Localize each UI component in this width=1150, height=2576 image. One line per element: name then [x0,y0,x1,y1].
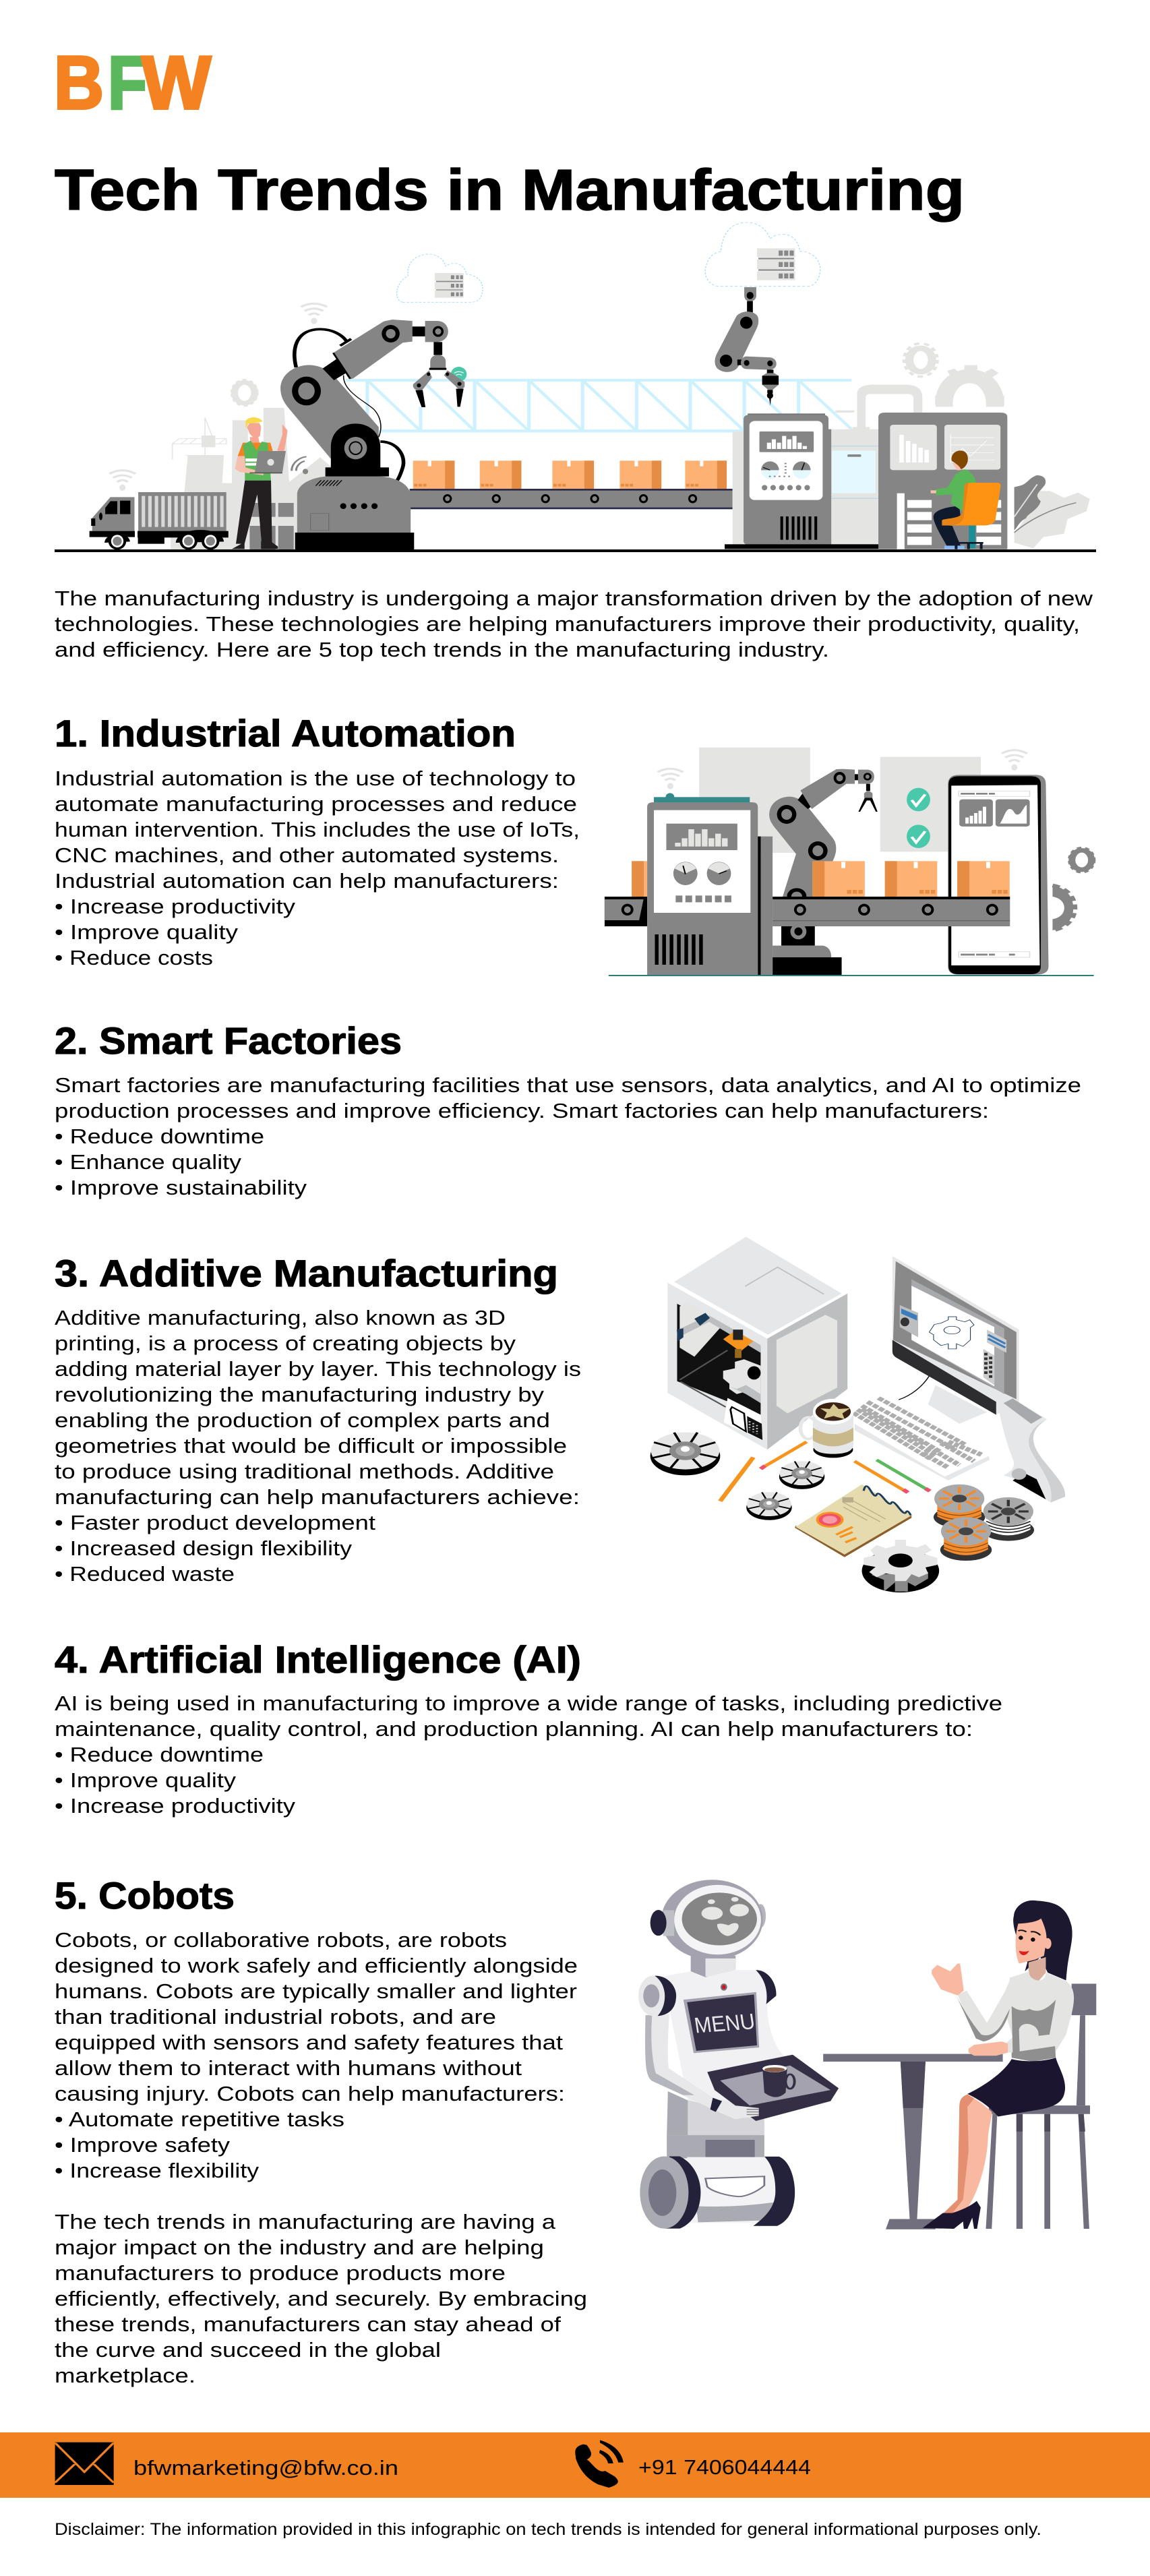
BFW logo: B [54,41,104,125]
intro paragraph: technologies. These technologies are helping manufacturers improve their productivity, quality, [55,612,1080,636]
heading: 4. Artificial Intelligence (AI): 4. Artificial Intelligence (AI) [55,1638,581,1681]
cardboard boxes [812,861,1010,897]
icon: envelope [55,2443,114,2485]
text block: cobots: humans. Cobots are typically smaller and lighter [55,1979,577,2003]
heading: 3. Additive Manufacturing: 3. Additive Manufacturing [55,1252,558,1294]
big robot arm [280,320,466,549]
tray with mug [707,2055,839,2121]
stand base [998,1398,1065,1503]
side signal icon [292,456,308,474]
text block: artificial intelligence: AI is being used in manufacturing to improve a wide range of tasks, including predictive [55,1691,1002,1715]
closing paragraph: The tech trends in manufacturing are having a [55,2210,556,2234]
phone number: +91 7406044444 [638,2455,811,2479]
intro paragraph: The manufacturing industry is undergoing a major transformation driven by the adoption of new [55,587,1093,610]
phone [948,775,1048,975]
text block: additive manufacturing: enabling the production of complex parts and [55,1408,550,1432]
text block: smart factories: • Enhance quality [55,1150,242,1174]
text block: artificial intelligence: • Increase productivity [55,1794,296,1818]
background gears and pipe [835,343,1004,427]
plant [1015,475,1090,548]
hanging robot arm with drill [715,287,779,406]
text block: industrial automation: Industrial automation can help manufacturers: [55,869,559,893]
wireframe gear [929,1317,974,1349]
text block: additive manufacturing: geometries that would be difficult or impossible [55,1434,567,1458]
text block: cobots: • Increase flexibility [55,2159,260,2182]
text block: additive manufacturing: • Increased design flexibility [55,1536,353,1560]
text block: additive manufacturing: printing, is a process of creating objects by [55,1331,516,1355]
shoulder and arm [645,2014,759,2118]
ground line [55,549,1096,552]
robot [638,1880,839,2229]
text block: industrial automation: • Increase productivity [55,895,296,918]
title: Tech Trends in Manufacturing [55,158,965,222]
cardboard boxes [619,460,727,489]
text block: industrial automation [55,767,580,969]
text block: additive manufacturing: • Faster product development [55,1511,375,1534]
chair [986,1983,1096,2229]
conveyor [605,861,1010,926]
hero right half: machines and operator [607,222,1090,549]
closing paragraph [55,2210,587,2387]
disclaimer: Disclaimer: The information provided in this infographic on tech trends is intended for general informational purposes only. [55,2520,1041,2539]
footer contact band [0,2432,1150,2498]
cardboard boxes [413,460,594,489]
wifi icons [658,750,1027,789]
operator console [878,413,1007,549]
text block: artificial intelligence: • Reduce downtime [55,1743,264,1766]
illustration: 3D printing desk [650,1236,1065,1592]
closing paragraph: marketplace. [55,2364,195,2387]
BFW logo [54,41,211,125]
text block: additive manufacturing: to produce using traditional methods. Additive [55,1460,554,1483]
text block: cobots: causing injury. Cobots can help manufacturers: [55,2082,565,2105]
text block: cobots: • Improve safety [55,2133,231,2157]
3D printer [667,1236,847,1449]
text block: industrial automation: • Reduce costs [55,946,213,969]
email address: bfwmarketing@bfw.co.in [133,2456,398,2480]
intro paragraph: and efficiency. Here are 5 top tech trends in the manufacturing industry. [55,638,829,661]
text block: cobots [55,1928,578,2182]
control machine [725,413,879,549]
illustration: automation line with phone [605,748,1095,976]
closing paragraph: manufacturers to produce products more [55,2261,506,2285]
gears [1052,847,1095,930]
gear discs [650,1432,824,1520]
text block: additive manufacturing: revolutionizing the manufacturing industry by [55,1383,545,1406]
text block: smart factories: Smart factories are manufacturing facilities that use sensors, data analytics, and AI to optimize [55,1073,1081,1097]
text block: smart factories: • Reduce downtime [55,1125,264,1148]
conveyor left part [410,489,607,509]
BFW logo: F [108,41,147,125]
heading: 5. Cobots: 5. Cobots [55,1874,235,1917]
text block: smart factories: • Improve sustainability [55,1176,307,1199]
background blocks [699,748,981,853]
closing paragraph: these trends, manufacturers can stay ahead of [55,2312,561,2336]
notebook [795,1485,911,1557]
robot: MENU [693,2010,756,2038]
text block: additive manufacturing: • Reduced waste [55,1562,235,1586]
pencils [720,1442,930,1501]
text block: additive manufacturing: adding material layer by layer. This technology is [55,1357,581,1381]
text block: industrial automation: automate manufacturing processes and reduce [55,792,577,816]
closing paragraph: efficiently, effectively, and securely. By embracing [55,2287,587,2310]
text block: additive manufacturing: manufacturing can help manufacturers achieve: [55,1485,580,1509]
icon: phone [575,2440,624,2488]
cloud with server [705,222,820,287]
text block: industrial automation: CNC machines, and other automated systems. [55,843,559,867]
hero illustration: factory production line [55,222,1096,552]
middle equipment [733,427,880,545]
text block: cobots: designed to work safely and efficiently alongside [55,1954,578,1977]
worker with laptop [232,417,288,549]
coffee mug [800,1399,853,1458]
seated woman [923,1900,1074,2229]
truck [90,492,229,549]
table [823,2054,1003,2229]
chest screen [684,1992,759,2053]
text block: cobots: allow them to interact with humans without [55,2056,522,2080]
text block: cobots: equipped with sensors and safety features that [55,2031,563,2054]
illustration: service robot and seated woman [638,1880,1096,2229]
hands [932,1964,964,1996]
wheel base [687,2157,775,2223]
monitor stand and cable [899,1376,987,1424]
text block: industrial automation: • Improve quality [55,920,239,944]
cloud with server [397,254,483,302]
BFW logo: W [142,41,211,125]
text block: cobots: Cobots, or collaborative robots, are robots [55,1928,507,1952]
skirt and leg [943,2095,992,2214]
text block: industrial automation: Industrial automation is the use of technology to [55,767,576,790]
hero left half: truck, worker, robot arm, conveyor [90,254,851,549]
text block: additive manufacturing [55,1306,581,1586]
keyboard [853,1397,990,1480]
truss [346,380,851,431]
text block: artificial intelligence: maintenance, quality control, and production planning. AI can help manufacturers to: [55,1717,973,1741]
control machine [647,793,773,976]
heading: 1. Industrial Automation: 1. Industrial Automation [55,712,516,754]
text block: cobots: • Automate repetitive tasks [55,2107,344,2131]
intro paragraph [55,587,1093,661]
seated operator [931,450,1001,549]
robot arm [769,769,878,975]
ground line [609,975,1094,976]
text block: smart factories: production processes and improve efficiency. Smart factories can help manufacturers: [55,1099,989,1122]
filament spools [934,1485,1034,1561]
large gear [862,1540,939,1592]
closing paragraph: major impact on the industry and are helping [55,2236,544,2259]
heading: 2. Smart Factories: 2. Smart Factories [55,1019,402,1062]
check marks [907,788,930,848]
sweater [1006,1971,1074,2053]
text block: additive manufacturing: Additive manufacturing, also known as 3D [55,1306,506,1329]
closing paragraph: the curve and succeed in the global [55,2338,441,2362]
text block: artificial intelligence: • Improve quality [55,1768,237,1792]
text block: smart factories [55,1073,1081,1199]
wifi icons [109,303,327,491]
background factory silhouette [171,380,332,549]
conveyor right part [607,489,733,509]
text block: cobots: than traditional industrial robots, and are [55,2005,496,2029]
monitor [892,1256,1019,1414]
text block: artificial intelligence [55,1691,1002,1818]
text block: industrial automation: human intervention. This includes the use of IoTs, [55,818,580,841]
